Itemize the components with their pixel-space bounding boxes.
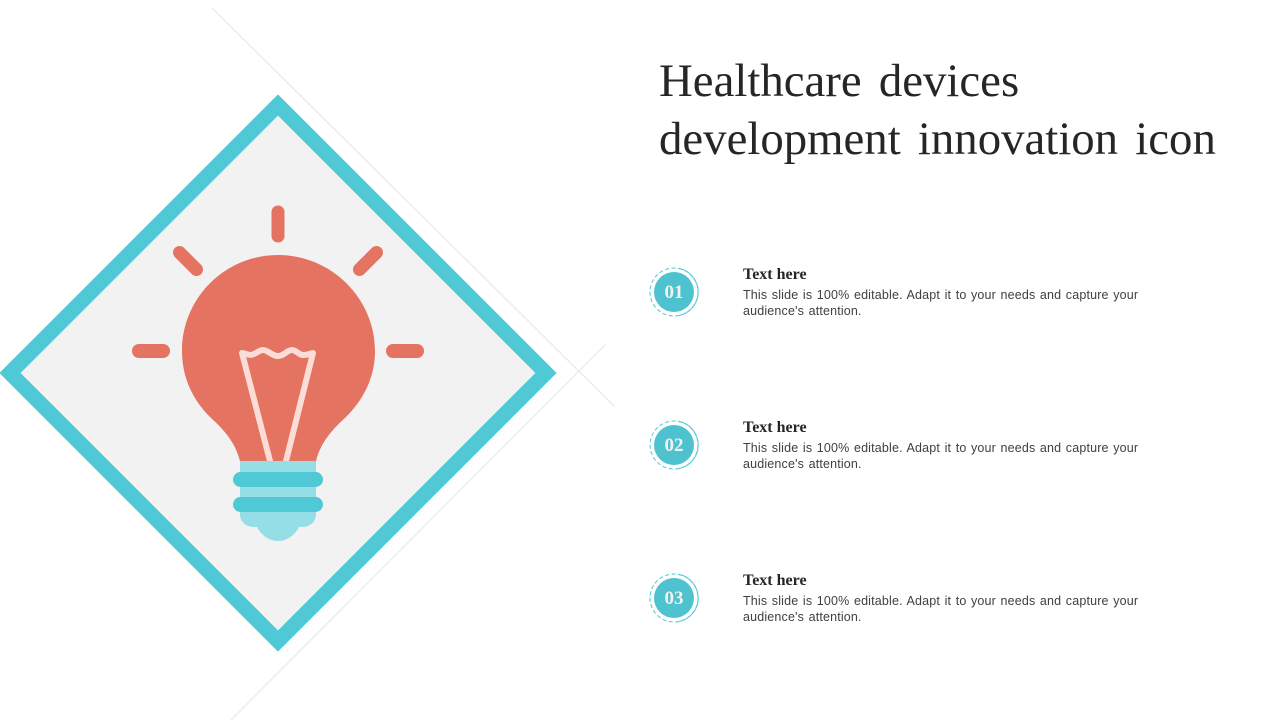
item body [743, 288, 1138, 318]
badge 03 [650, 574, 699, 622]
diamond panel [10, 105, 546, 641]
illustration: lightbulb in diamond [0, 8, 616, 720]
title: Healthcare devices [659, 55, 1019, 107]
item body: This slide is 100% editable. Adapt it to your needs and capture your [743, 594, 1138, 608]
title [659, 55, 1216, 165]
item body: audience's attention. [743, 457, 862, 471]
item text: Text here [743, 419, 807, 436]
item body [743, 441, 1138, 471]
badge 01: 01 [664, 282, 684, 303]
item 01 [650, 266, 1138, 318]
badge 02: 02 [664, 435, 684, 456]
item body: This slide is 100% editable. Adapt it to your needs and capture your [743, 441, 1138, 455]
bulb glass [182, 255, 375, 461]
thin crossing lines [212, 8, 615, 720]
item text: Text here [743, 266, 807, 283]
bulb base [240, 461, 316, 541]
base bands [233, 472, 323, 487]
item 02 [650, 419, 1138, 471]
item 03 [650, 572, 1138, 624]
item body: This slide is 100% editable. Adapt it to your needs and capture your [743, 288, 1138, 302]
item body [743, 594, 1138, 624]
item text: Text here [743, 572, 807, 589]
item body: audience's attention. [743, 610, 862, 624]
icon: lightbulb [139, 212, 417, 541]
title: development innovation icon [659, 113, 1216, 165]
filament [242, 350, 313, 461]
badge 03: 03 [664, 588, 684, 609]
bulb rays [139, 212, 417, 351]
item body: audience's attention. [743, 304, 862, 318]
badge 01 [650, 268, 699, 316]
badge 02 [650, 420, 699, 470]
